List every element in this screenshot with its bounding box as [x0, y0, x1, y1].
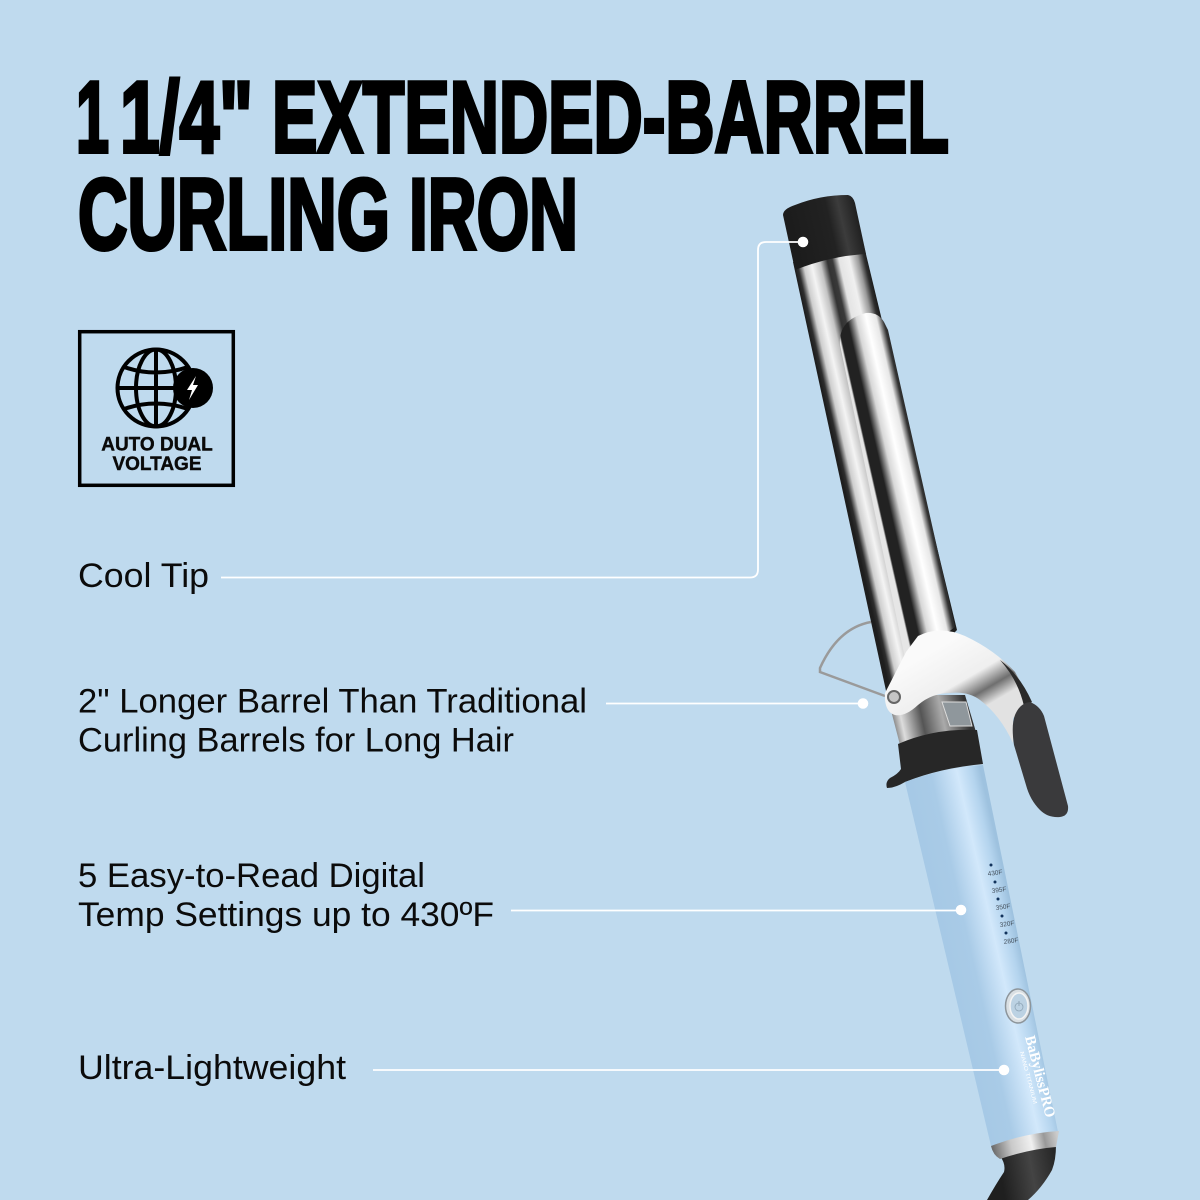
callout: ultra-lightweight: Ultra-Lightweight	[78, 1049, 346, 1087]
silver ring	[991, 1131, 1059, 1159]
brand logo: BaBylissPRO	[1021, 1034, 1058, 1119]
callout: ultra-lightweight	[78, 1049, 1009, 1087]
brand logo: NANO TITANIUM	[1018, 1051, 1038, 1105]
callout: cool tip: Cool Tip	[78, 557, 209, 595]
badge: auto dual voltage: VOLTAGE	[112, 454, 202, 475]
cool tip	[783, 195, 866, 270]
handle	[905, 765, 1058, 1146]
temperature scale: 350F	[995, 903, 1011, 912]
clip wire	[820, 622, 885, 696]
callout: longer barrel	[78, 682, 868, 760]
temperature scale: 430F	[987, 869, 1003, 878]
temperature scale	[987, 864, 1019, 946]
clamp	[840, 313, 955, 668]
barrel	[793, 246, 957, 700]
title: CURLING	[78, 159, 390, 271]
cord	[987, 1145, 1056, 1200]
icon: lightning bolt	[173, 368, 213, 408]
callout: digital temp settings: Temp Settings up to 430ºF	[78, 896, 494, 934]
collar	[886, 730, 983, 788]
title: 1/4"	[120, 62, 253, 174]
neck	[887, 695, 976, 745]
callout: digital temp settings	[78, 857, 966, 934]
power button	[1006, 989, 1030, 1023]
title	[76, 62, 949, 271]
title: IRON	[409, 159, 578, 271]
icon: globe	[118, 350, 194, 426]
callout: digital temp settings: 5 Easy-to-Read Digital	[78, 857, 425, 895]
clamp lever	[885, 630, 1032, 743]
callout: cool tip	[78, 237, 808, 595]
temperature scale: 280F	[1003, 937, 1019, 946]
callout: longer barrel: 2" Longer Barrel Than Traditional	[78, 682, 587, 720]
curling iron product image	[783, 195, 1068, 1200]
hinge bracket	[942, 702, 972, 726]
badge: auto dual voltage	[80, 332, 233, 485]
badge: auto dual voltage: AUTO DUAL	[101, 434, 213, 456]
title: 1	[76, 62, 109, 174]
lever dark edge	[1000, 660, 1032, 706]
temperature scale: 395F	[991, 886, 1007, 895]
callout: longer barrel: Curling Barrels for Long Hair	[78, 722, 514, 760]
thumb rest	[1013, 702, 1068, 817]
temperature scale: 320F	[999, 920, 1015, 929]
hinge screw	[888, 691, 900, 703]
